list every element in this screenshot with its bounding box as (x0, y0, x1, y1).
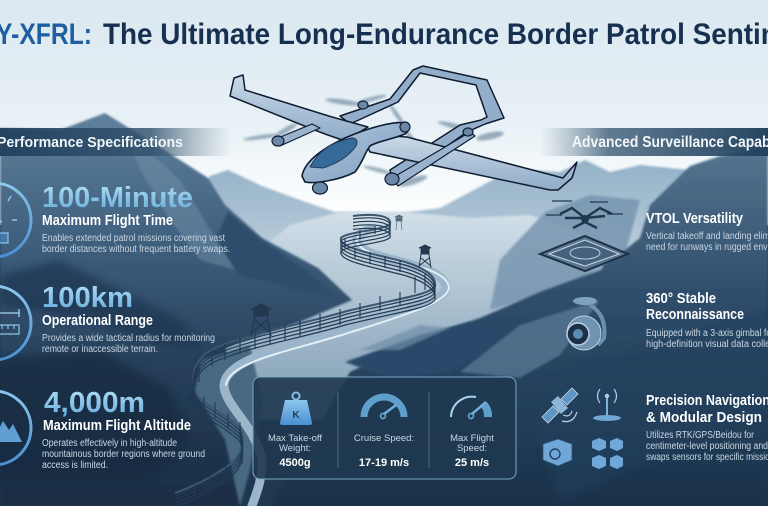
capability: 360 stable reconnaissance: 360° Stable (646, 291, 716, 307)
icon: mountain altitude (0, 391, 31, 465)
drone aircraft (230, 66, 577, 194)
spec: cruise speed: Cruise Speed: (354, 433, 414, 444)
banner: performance specifications: Performance Specifications (0, 134, 183, 151)
watchtowers (251, 215, 431, 336)
metric: operational range: Operational Range (42, 313, 153, 329)
capability: 360 stable reconnaissance: Reconnaissance (646, 307, 744, 323)
sky background (0, 0, 768, 225)
icon: cruise speed gauge (364, 397, 404, 418)
icon: weight: K (292, 410, 300, 421)
background: mountains and valley (0, 113, 768, 506)
front booms (273, 124, 475, 186)
banner: advanced surveillance capabilities (540, 128, 768, 156)
border fence (175, 215, 435, 506)
metric: flight altitude: access is limited. (42, 460, 108, 471)
icon: max speed gauge (451, 397, 492, 418)
capability: precision navigation and modular design (542, 388, 768, 469)
spec: max flight speed: 25 m/s (455, 457, 489, 469)
capability: VTOL versatility: VTOL Versatility (646, 211, 743, 227)
metric: flight time: Enables extended patrol missions covering vast (42, 233, 225, 244)
metric: flight altitude: Maximum Flight Altitude (43, 418, 191, 434)
spec: max take-off weight: Max Take-off (268, 433, 322, 444)
capability: VTOL versatility (540, 201, 768, 271)
metric: flight time: border distances without frequent battery swaps. (42, 244, 230, 255)
icon: quadcopter and landing pad (540, 201, 628, 271)
panel: key specifications (253, 377, 516, 479)
icon: ruler range (0, 286, 31, 360)
spec: max take-off weight: 4500g (279, 457, 311, 469)
icon: weight (280, 392, 312, 425)
icon: satellite, antenna and modules (542, 388, 623, 469)
icon: gimbal camera (567, 297, 604, 350)
icon: gauge with battery (0, 183, 31, 257)
spec: max take-off weight (268, 433, 322, 469)
capability: precision navigation and modular design: & Modular Design (646, 410, 762, 426)
capability: 360 stable reconnaissance (567, 291, 768, 350)
metric: flight altitude: Operates effectively in high-altitude (42, 438, 177, 449)
metric: flight altitude: 4,000m (44, 387, 145, 419)
winding patrol road (224, 229, 449, 506)
right wing (365, 136, 577, 190)
spec: max flight speed (450, 433, 494, 469)
motors and wheel (272, 101, 473, 194)
metric: operational range: Provides a wide tactical radius for monitoring (42, 333, 215, 344)
metric: operational range (0, 282, 215, 360)
left wing (230, 75, 368, 141)
metric: flight altitude (0, 387, 205, 471)
metric: flight time: 100-Minute (42, 182, 193, 214)
spec: max take-off weight: Weight: (279, 443, 311, 454)
spec: cruise speed: 17-19 m/s (359, 457, 409, 469)
metric: flight altitude: mountainous border regions where ground (42, 449, 205, 460)
canopy (310, 138, 357, 168)
tail boom frame (340, 66, 504, 178)
spec: max flight speed: Max Flight (450, 433, 494, 444)
spec: max flight speed: Speed: (457, 443, 487, 454)
metric: operational range: remote or inaccessible terrain. (42, 344, 158, 355)
metric: flight time (0, 182, 230, 257)
propeller blur (243, 93, 504, 189)
metric: flight time: Maximum Flight Time (42, 213, 173, 229)
fuselage (302, 123, 409, 183)
metric: operational range: 100km (42, 282, 133, 314)
spec: cruise speed (354, 433, 414, 469)
banner: performance specifications (0, 128, 232, 156)
